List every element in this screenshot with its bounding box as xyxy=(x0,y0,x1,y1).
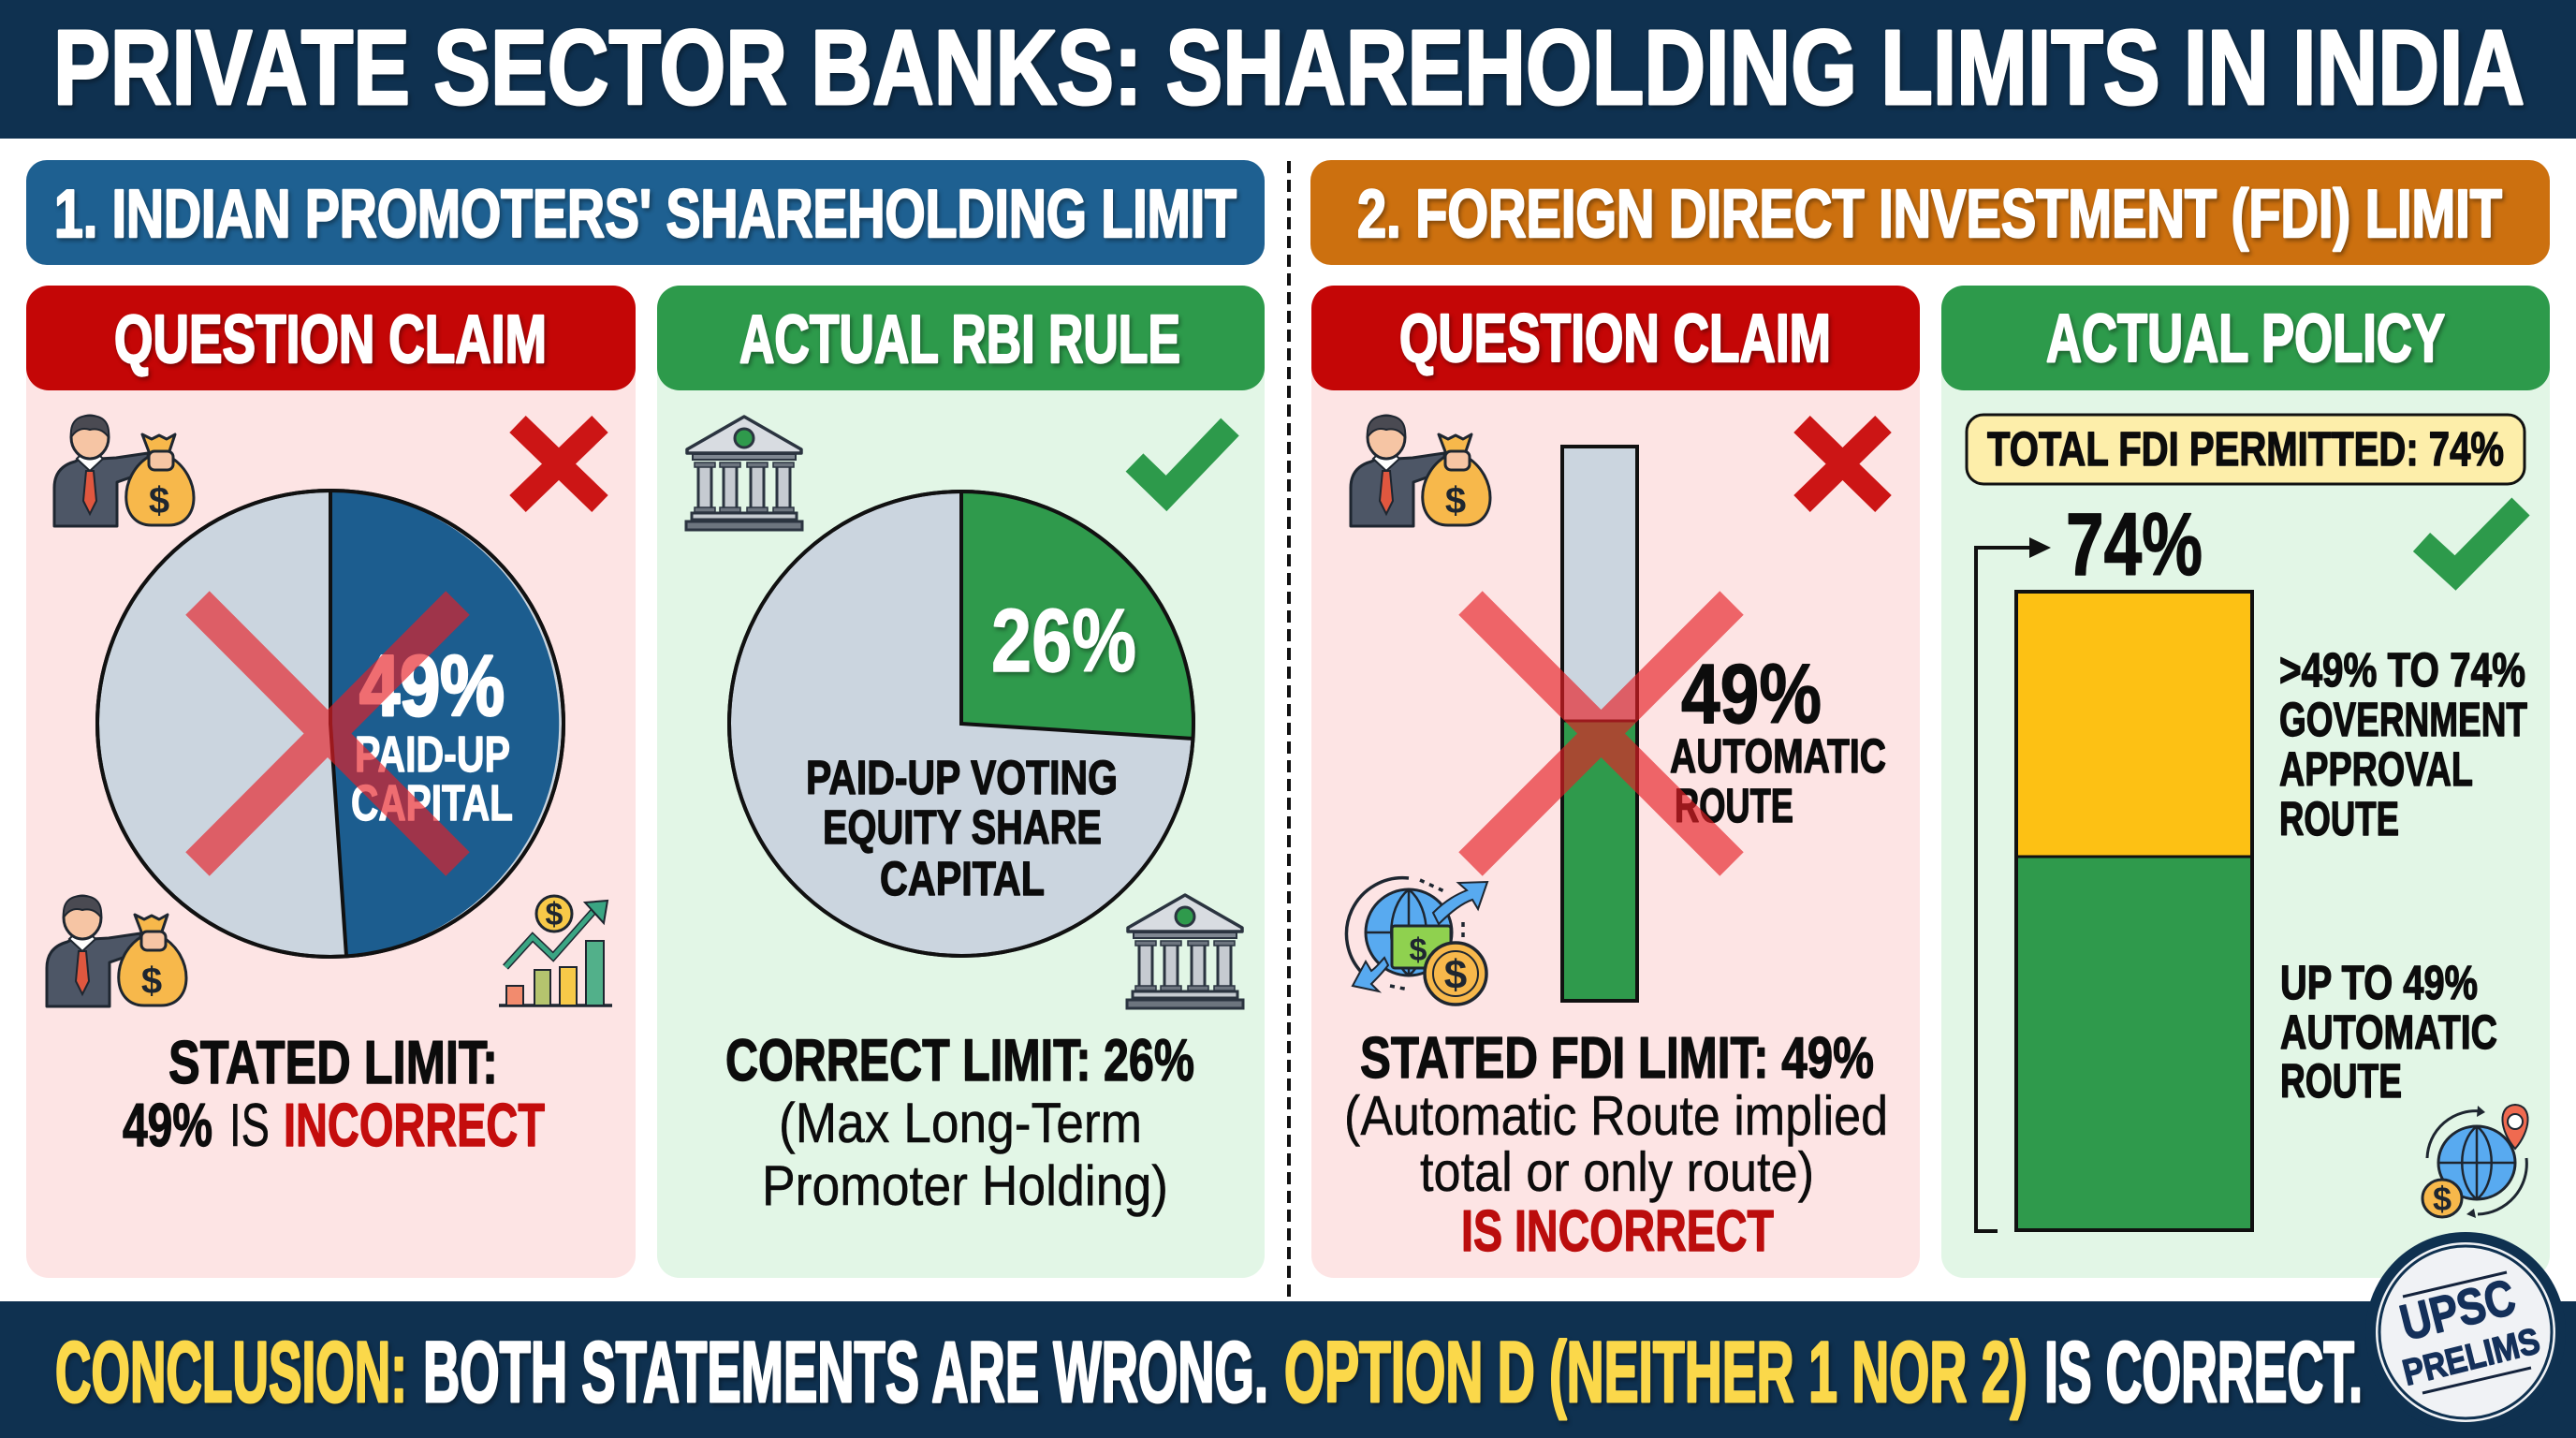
divider between sections xyxy=(1287,161,1291,1301)
large cross over pie xyxy=(198,603,458,864)
label: government approval route xyxy=(2279,643,2527,845)
verdict text: (Max Long-Term xyxy=(779,1092,1142,1154)
panel header: ACTUAL RBI RULE xyxy=(739,302,1180,377)
verdict text xyxy=(123,1028,545,1159)
icon: globe with pin and coin xyxy=(2422,1105,2528,1218)
icon: investor with money bag xyxy=(54,416,194,526)
icon: bank xyxy=(1127,895,1243,1008)
verdict text xyxy=(1344,1026,1888,1264)
large cross over bar xyxy=(1471,603,1732,864)
pie chart: 26 percent: 26% xyxy=(991,591,1136,691)
section heading 1 xyxy=(26,160,1265,265)
section heading 1: 1. INDIAN PROMOTERS' SHAREHOLDING LIMIT xyxy=(54,177,1237,252)
label: automatic route: UP TO 49% xyxy=(2280,956,2478,1009)
panel header xyxy=(26,286,636,390)
pie chart: 26 percent: CAPITAL xyxy=(880,852,1045,905)
verdict text: 49% xyxy=(123,1091,212,1159)
icon: green check xyxy=(1134,427,1230,493)
conclusion banner: BOTH STATEMENTS ARE WRONG. xyxy=(423,1325,1268,1420)
panel: actual policy xyxy=(1941,286,2550,1278)
conclusion banner: OPTION D (NEITHER 1 NOR 2) xyxy=(1284,1325,2027,1420)
icon: global money flow: $ xyxy=(1444,952,1467,998)
panel header xyxy=(1941,286,2550,390)
panel: question claim, FDI xyxy=(1311,286,1920,1278)
label: automatic route xyxy=(2280,956,2497,1108)
bar label: 49% xyxy=(1681,648,1822,741)
icon: bank xyxy=(686,417,802,530)
pie chart: 49 percent: 49% xyxy=(359,638,505,734)
verdict text: CORRECT LIMIT: 26% xyxy=(725,1028,1194,1093)
verdict text: IS INCORRECT xyxy=(1461,1199,1774,1264)
stamp: UPSC prelims: UPSC xyxy=(2394,1269,2521,1352)
conclusion banner: CONCLUSION: xyxy=(55,1325,407,1420)
verdict text: IS xyxy=(229,1091,270,1159)
conclusion banner: IS CORRECT. xyxy=(2044,1325,2363,1420)
icon: red cross xyxy=(1802,424,1883,504)
icon: globe with pin and coin: $ xyxy=(2433,1180,2452,1218)
verdict text: total or only route) xyxy=(1420,1141,1814,1203)
icon: global money flow: $ xyxy=(1410,932,1427,968)
section heading 2 xyxy=(1310,160,2550,265)
stacked bar chart: 74 percent xyxy=(2016,592,2252,1230)
verdict text: Promoter Holding) xyxy=(762,1154,1168,1217)
label: government approval route: APPROVAL xyxy=(2279,742,2473,796)
icon: global money flow xyxy=(1346,878,1487,1005)
conclusion banner xyxy=(0,1301,2576,1438)
icon: investor with money bag xyxy=(47,896,186,1006)
panel header: QUESTION CLAIM xyxy=(114,302,547,377)
icon: green check xyxy=(2422,506,2521,573)
stamp: UPSC prelims xyxy=(2365,1232,2566,1432)
pie chart: 49 percent: CAPITAL xyxy=(351,775,513,831)
verdict text: STATED FDI LIMIT: 49% xyxy=(1360,1026,1874,1091)
pie chart: 26 percent xyxy=(729,492,1194,956)
pie chart: 26 percent: EQUITY SHARE xyxy=(823,800,1102,854)
bar label: AUTOMATIC xyxy=(1670,729,1886,783)
panel header xyxy=(1311,286,1920,390)
label: government approval route: ROUTE xyxy=(2279,792,2399,845)
icon: growth chart xyxy=(499,896,612,1005)
callout: total FDI permitted xyxy=(1967,415,2525,484)
panel header xyxy=(657,286,1265,390)
label: automatic route: AUTOMATIC xyxy=(2280,1005,2497,1059)
bar chart: 49 percent xyxy=(1562,447,1637,1001)
stamp: UPSC prelims: PRELIMS xyxy=(2399,1321,2544,1394)
verdict text xyxy=(725,1028,1194,1217)
panel header: QUESTION CLAIM xyxy=(1399,301,1831,376)
verdict text: INCORRECT xyxy=(284,1091,545,1159)
pie chart: 26 percent: PAID-UP VOTING xyxy=(806,751,1118,804)
arrow: bracket to total xyxy=(1976,537,2051,1231)
bar total label: 74% xyxy=(2066,495,2203,594)
pie chart: 49 percent xyxy=(97,491,564,957)
pie chart: 49 percent: PAID-UP xyxy=(355,726,510,783)
panel header: ACTUAL POLICY xyxy=(2046,301,2445,376)
icon: growth chart: $ xyxy=(546,897,564,932)
verdict text: (Automatic Route implied xyxy=(1344,1085,1888,1147)
icon: red cross xyxy=(518,424,600,504)
panel: question claim, promoters xyxy=(26,286,636,1278)
icon: investor with money bag xyxy=(1351,416,1490,526)
bar label xyxy=(1670,648,1886,832)
bar label: ROUTE xyxy=(1675,779,1793,832)
verdict text: STATED LIMIT: xyxy=(168,1028,498,1096)
label: automatic route: ROUTE xyxy=(2280,1054,2402,1108)
panel: actual RBI rule xyxy=(657,286,1265,1278)
